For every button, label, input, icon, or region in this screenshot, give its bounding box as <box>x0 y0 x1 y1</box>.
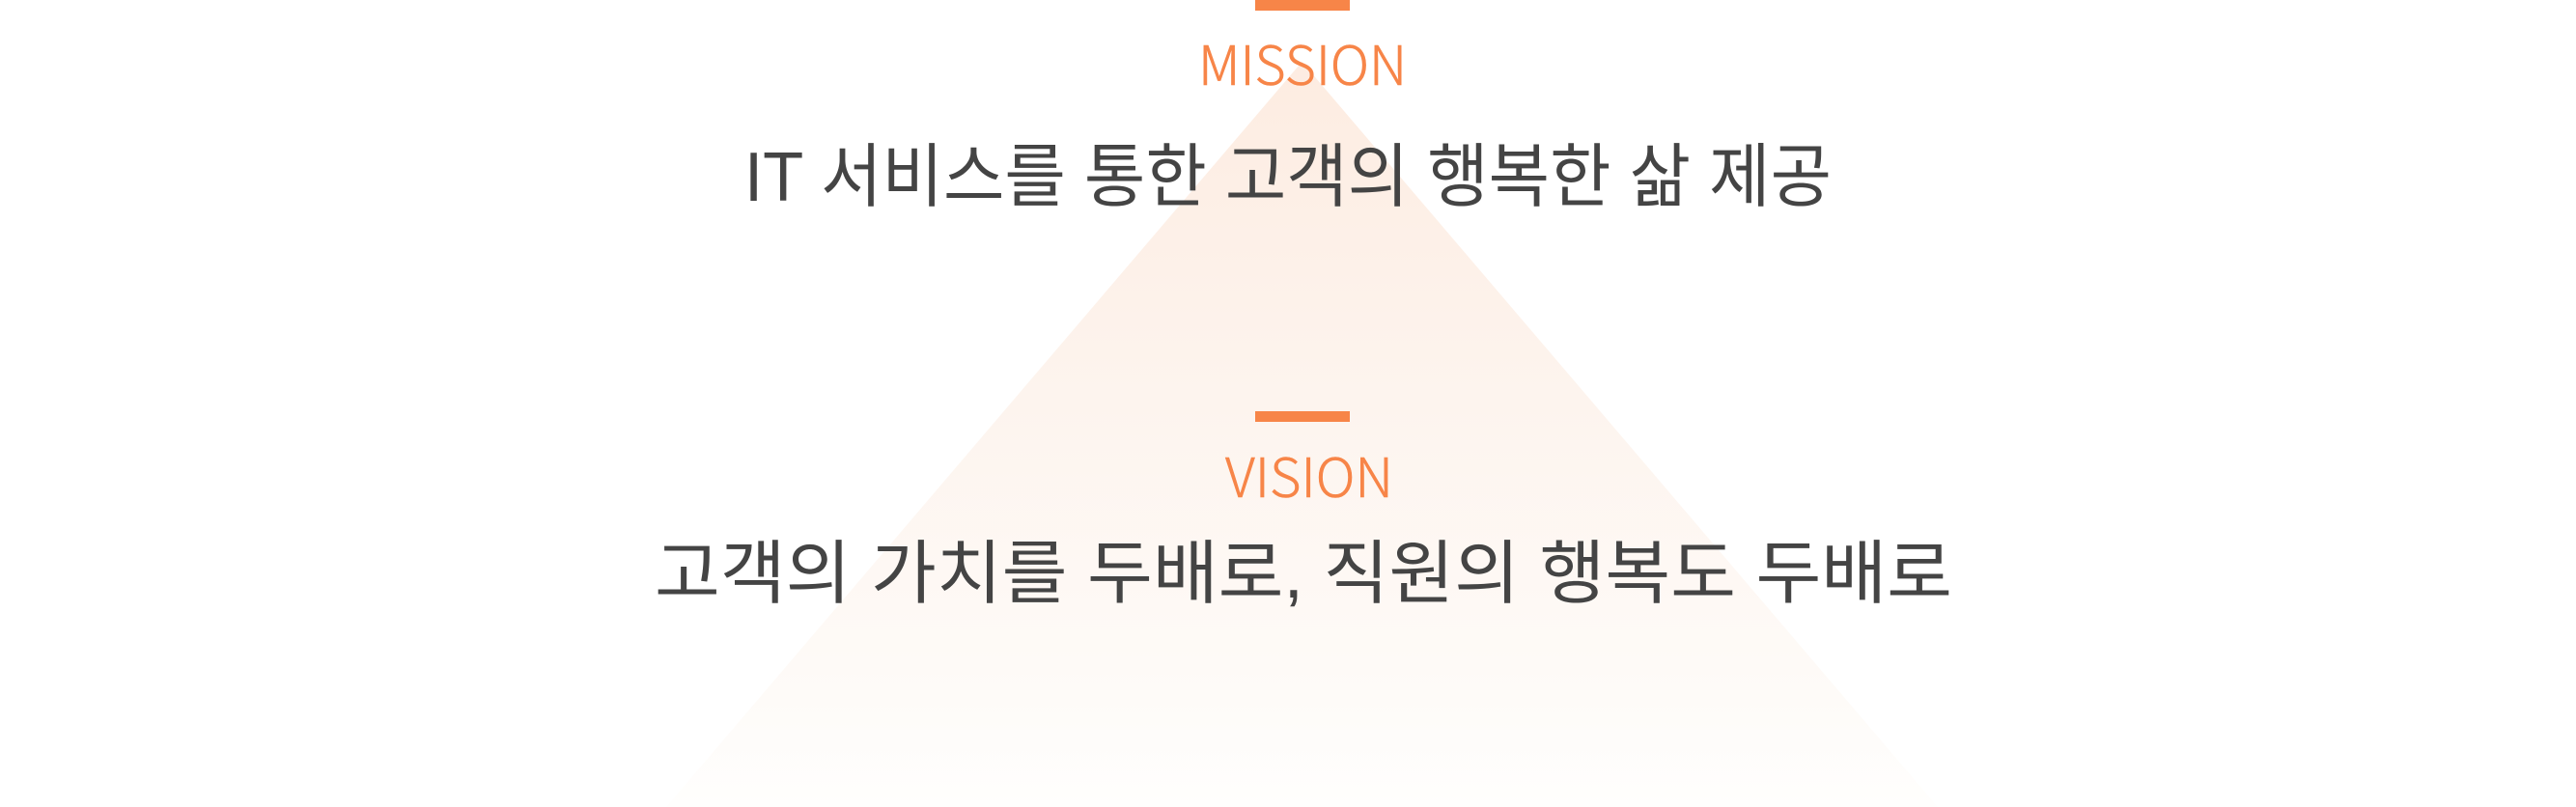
mission label: MISSION <box>1198 23 1407 101</box>
mission accent bar <box>1255 0 1350 11</box>
mission section <box>744 0 1832 216</box>
vision statement: 고객의 가치를 두배로, 직원의 행복도 두배로 <box>655 536 1952 613</box>
vision accent bar <box>1255 411 1350 422</box>
vision label: VISION <box>1225 435 1393 514</box>
background triangle <box>666 62 1938 807</box>
mission statement: IT 서비스를 통한 고객의 행복한 삶 제공 <box>744 139 1832 216</box>
vision section <box>655 411 1952 613</box>
